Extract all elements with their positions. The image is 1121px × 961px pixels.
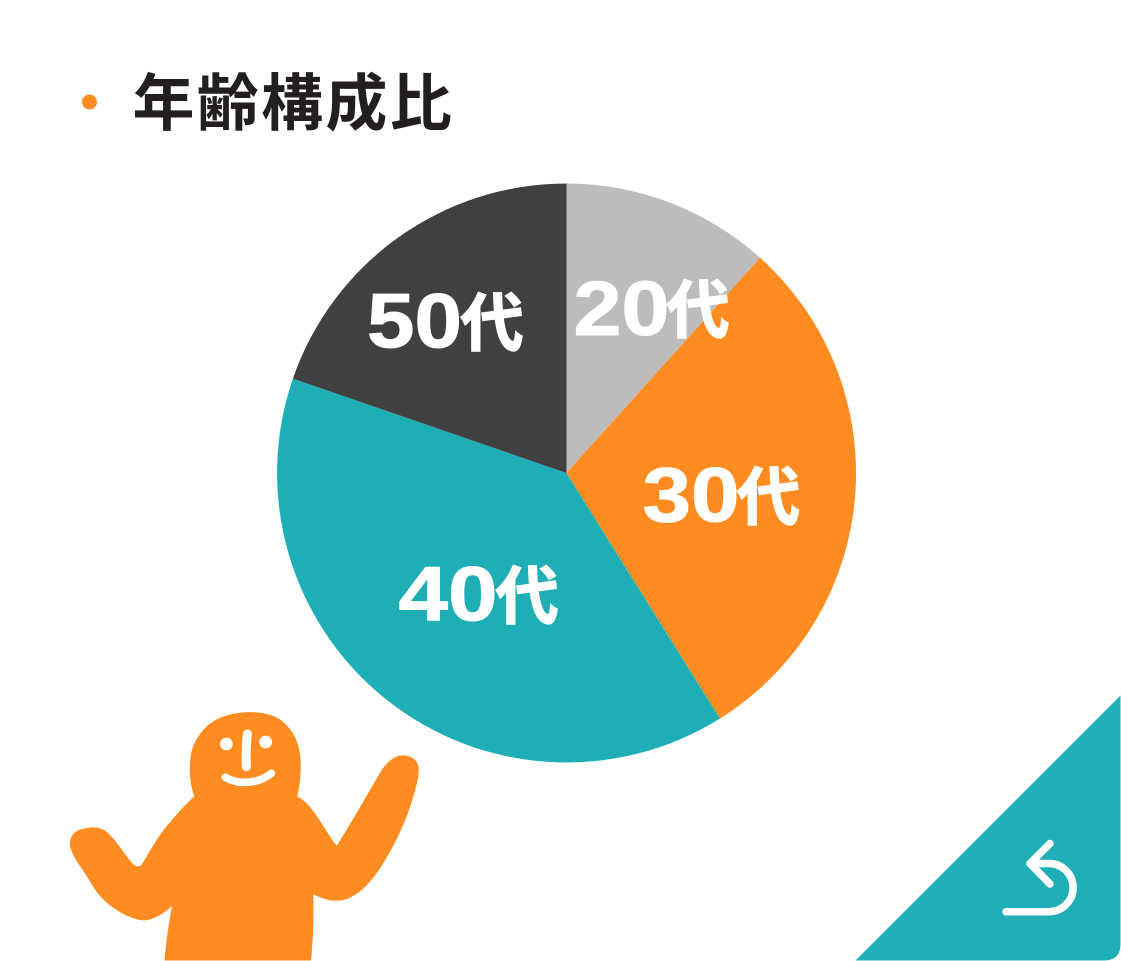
nose — [246, 734, 247, 767]
slice: 30代 — [566, 258, 856, 718]
label: 40代 — [398, 546, 558, 638]
bullet dot — [82, 94, 97, 110]
slice: 20代 — [566, 184, 760, 473]
back button: teal corner triangle — [856, 696, 1120, 960]
label: 30代: 30 — [642, 452, 740, 538]
label: 20代: 代 — [666, 260, 730, 352]
label: 30代: 代 — [737, 448, 800, 538]
character illustration: orange figure with raised arms — [70, 713, 418, 960]
icon: return arrow — [1006, 844, 1073, 912]
label: 30代 — [642, 448, 800, 538]
slice: 50代 — [293, 184, 566, 473]
label: 50代 — [367, 274, 524, 364]
teal triangle — [856, 696, 1120, 960]
heading: 年齢構成比 — [82, 53, 454, 143]
label: 50代: 代 — [460, 274, 524, 364]
label: 20代 — [574, 260, 730, 352]
heading text: 年齢構成比 — [132, 53, 454, 143]
label: 50代: 50 — [367, 278, 462, 364]
right eye — [259, 736, 272, 748]
label: 40代: 代 — [496, 546, 558, 638]
label: 20代: 20 — [574, 266, 670, 352]
left eye — [220, 738, 233, 750]
pie chart: age composition — [277, 184, 856, 762]
slice: 40代 — [277, 379, 720, 762]
mouth — [225, 773, 271, 782]
label: 40代: 40 — [398, 552, 498, 638]
figure body — [70, 713, 418, 960]
